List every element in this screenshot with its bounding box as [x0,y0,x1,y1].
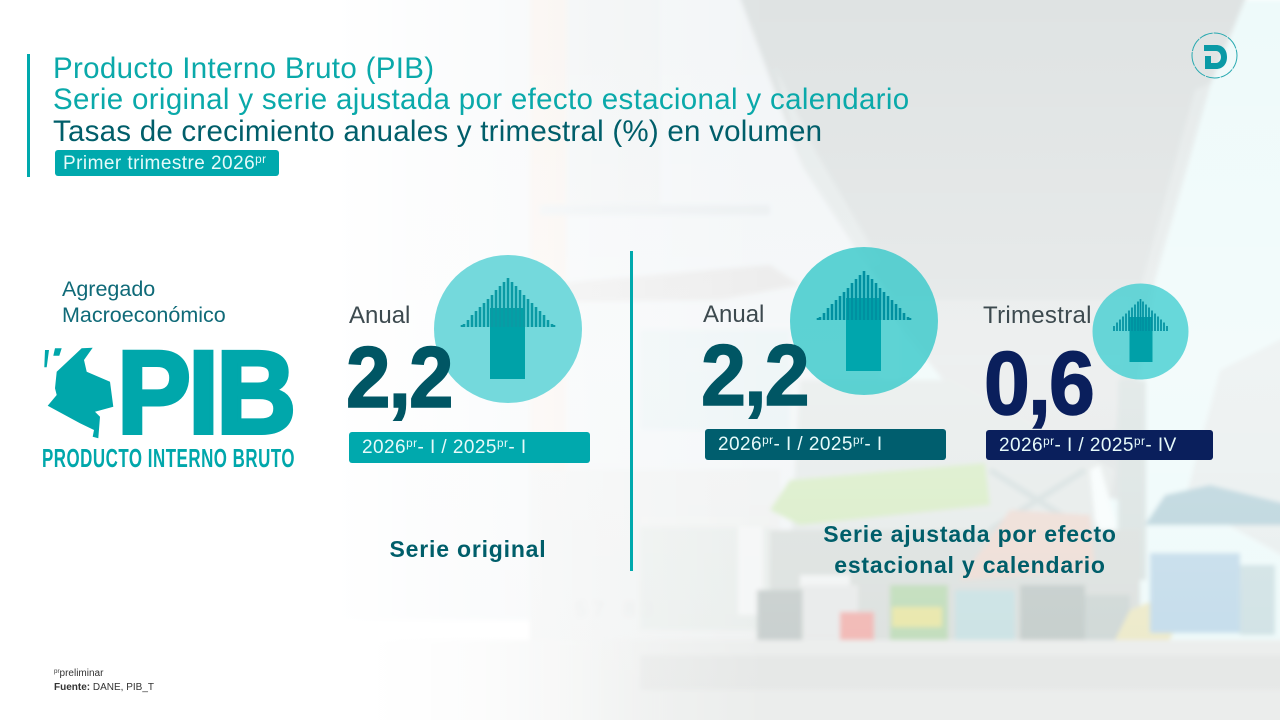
icon: DANE logo [1192,32,1238,78]
value: 0,6: 0,6 [984,334,1093,434]
icon: up arrow circle [434,255,582,403]
footnote: Fuente: DANE, PIB_T [54,682,154,693]
value: 2,2: 2,2 [346,330,452,426]
period bar: 2026pr- I / 2025pr- I [362,437,527,458]
icon: PIB logo [42,327,295,473]
icon: Colombia map [44,348,114,438]
title line 3: Tasas de crecimiento anuales y trimestral (%) en volumen [53,115,822,148]
label: Anual: Anual [349,302,410,329]
period bar: 2026pr- I / 2025pr- I [718,434,883,455]
title line 1: Producto Interno Bruto (PIB) [53,52,434,85]
label: Anual: Anual [703,301,764,328]
panel: serie ajustada anual [701,247,946,460]
title accent bar [27,54,30,177]
caption: Serie ajustada [823,521,1117,578]
footnote [54,668,154,693]
street level [640,520,770,630]
icon: up arrow circle [790,247,938,395]
background: washed-out street photo: 57 83 [575,599,660,621]
period bar [349,432,590,463]
right building [1185,335,1280,560]
heading: Agregado Macroeconómico: Macroeconómico [62,303,226,327]
trusses [990,470,1085,530]
divider line [630,251,633,571]
title line 2: Serie original y serie ajustada por efecto estacional y calendario [53,83,909,116]
period bar [705,429,946,460]
period bar: 2026pr- I / 2025pr- IV [999,435,1177,456]
icon: up arrow circle [1092,284,1188,380]
PIB letters: PIB [117,327,293,459]
label: Trimestral: Trimestral [983,302,1092,329]
left building [330,0,880,620]
title block [53,52,909,176]
ground [330,640,1280,720]
sky [900,0,1280,720]
bridge underside [737,0,1249,500]
logo caption: PRODUCTO INTERNO BRUTO [42,443,295,473]
caption: Serie ajustada: Serie ajustada por efecto [823,521,1117,547]
heading: Agregado Macroeconómico [62,277,226,327]
panel: serie original [346,255,590,562]
footnote: prpreliminar [54,668,103,679]
panel: serie ajustada trimestral [983,284,1213,460]
caption: Serie ajustada: estacional y calendario [834,552,1106,578]
period bar [986,430,1213,460]
period tag: Primer trimestre 2026pr [63,153,266,174]
caption: Serie original: Serie original [390,536,546,562]
heading: Agregado Macroeconómico: Agregado [62,277,155,301]
value: 2,2: 2,2 [701,328,808,424]
